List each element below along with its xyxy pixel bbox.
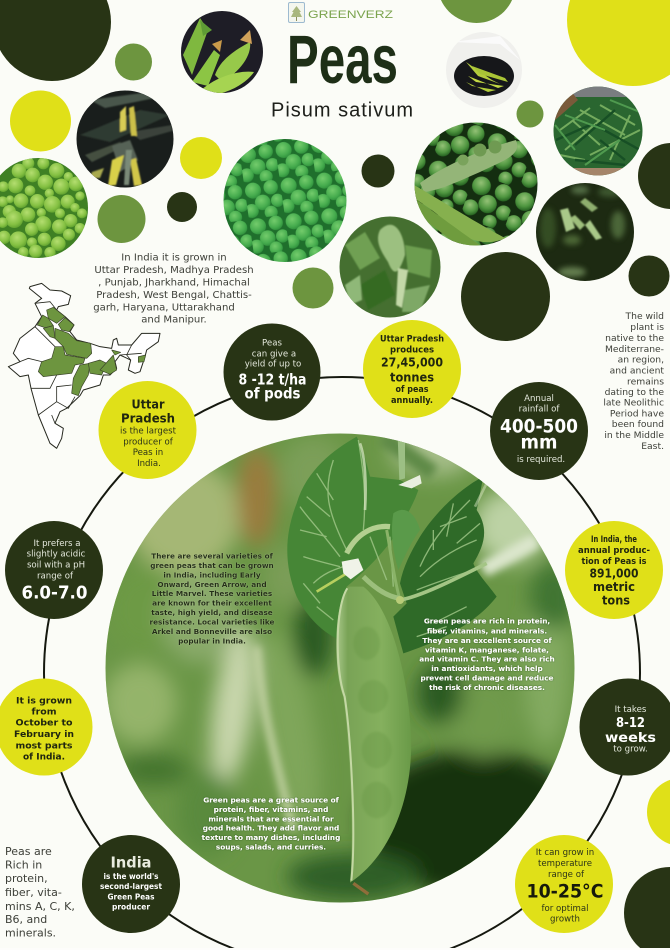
circle: yield: can give a <box>252 350 296 360</box>
photo: peas with open pods <box>414 122 538 248</box>
paragraph: health: texture to many dishes, including <box>202 833 340 842</box>
circle: temperature: growth <box>550 914 580 924</box>
paragraph: health: soups, salads, and curries. <box>216 842 326 852</box>
circle: Uttar Pradesh output: produces <box>390 346 434 356</box>
title: Peas <box>287 21 398 98</box>
text: growing states: , Punjab, Jharkhand, Himachal <box>98 278 250 288</box>
paragraph: varieties: Onward, Green Arrow, and <box>157 580 267 589</box>
photo: pea plant leaves <box>339 216 441 318</box>
photo: green beans <box>553 86 643 176</box>
photo: peas close-up centre <box>224 139 346 262</box>
text: wild plant history: and ancient <box>610 366 664 376</box>
paragraph: nutrients: vitamin K, manganese, folate, <box>425 646 549 654</box>
circle: annual production: metric <box>593 580 635 594</box>
circle: soil pH: It prefers a <box>33 539 81 549</box>
circle: Uttar Pradesh output: 27,45,000 <box>381 354 443 370</box>
paragraph: varieties: are known for their excellent <box>152 598 272 608</box>
circle: India second-largest: producer <box>112 902 150 912</box>
circle: soil pH: soil with a pH <box>27 560 85 570</box>
text: wild plant history: plant is <box>630 322 664 333</box>
circle: growing season: of India. <box>23 752 65 762</box>
circle: Uttar Pradesh largest producer: Peas in <box>133 448 163 458</box>
circle: rainfall: mm <box>520 432 558 454</box>
text: nutrients summary: mins A, C, K, <box>5 900 75 913</box>
photo: pods in black bowl <box>446 32 522 108</box>
circle: rainfall: is required. <box>517 455 565 465</box>
paragraph: nutrients: in antioxidants, which help <box>431 664 543 673</box>
circle: rainfall: Annual <box>524 394 554 404</box>
circle: growing time <box>580 678 670 776</box>
paragraph: varieties: Arkel and Bonneville are also <box>152 627 272 636</box>
circle: yield: yield of up to <box>245 360 301 370</box>
text: wild plant history: Mediterrane- <box>605 344 664 355</box>
circle: growing time: weeks <box>605 730 656 746</box>
text: nutrients summary: B6, and <box>5 913 47 926</box>
circle: India second-largest: India <box>110 854 152 872</box>
map of India <box>8 283 160 448</box>
circle: India second-largest <box>82 835 180 933</box>
stems and flower <box>347 526 390 553</box>
text: growing states: Pradesh, West Bengal, Chattis- <box>96 290 252 301</box>
paragraph: varieties: green peas that can be grown <box>150 561 274 570</box>
circle: soil pH: slightly acidic <box>27 550 86 560</box>
circle: growing time: to grow. <box>613 744 648 754</box>
paragraph: health <box>202 796 340 852</box>
circle: yield: 8 -12 t/ha <box>238 370 306 388</box>
circle: rainfall: 400-500 <box>500 416 578 438</box>
circle: Uttar Pradesh largest producer <box>98 381 196 479</box>
circle: growing time: It takes <box>615 705 647 715</box>
leaves <box>287 437 418 640</box>
circle: annual production: annual produc- <box>578 546 650 556</box>
circle: India second-largest: second-largest <box>100 882 162 891</box>
text: wild plant history: been found <box>612 419 664 430</box>
text: wild plant history: Period have <box>610 408 664 420</box>
text: wild plant history: in the Middle <box>604 430 664 441</box>
circle: rainfall: rainfall of <box>519 404 560 414</box>
circle: growing time: 8-12 <box>616 715 645 731</box>
circle: Uttar Pradesh largest producer: is the largest <box>120 426 177 436</box>
circle: soil pH: range of <box>37 572 74 582</box>
text: nutrients summary: Peas are <box>5 845 52 858</box>
circle: growing season: October to <box>16 718 72 728</box>
text: wild plant history <box>603 311 664 452</box>
paragraph: health: protein, fiber, vitamins, and <box>214 805 328 814</box>
photo: dark leaves and pods <box>535 182 635 282</box>
circle: Uttar Pradesh output <box>363 320 461 418</box>
circle: temperature <box>515 835 613 933</box>
circle: soil pH: 6.0-7.0 <box>22 582 88 604</box>
text: nutrients summary: protein, <box>5 872 48 885</box>
circle: Uttar Pradesh output: Uttar Pradesh <box>380 334 444 344</box>
ring line <box>44 377 640 950</box>
circle: Uttar Pradesh largest producer: Pradesh <box>121 412 175 426</box>
circle: yield: Peas <box>262 338 282 348</box>
paragraph: varieties: popular in India. <box>178 636 246 646</box>
text: wild plant history: an region, <box>618 354 664 366</box>
circle: Uttar Pradesh output: of peas <box>396 384 429 394</box>
central photo <box>100 423 583 910</box>
circle: annual production: tons <box>602 594 630 608</box>
text: growing states: Uttar Pradesh, Madhya Pradesh <box>94 265 254 276</box>
paragraph: nutrients <box>419 616 555 692</box>
text: wild plant history: The wild <box>625 311 664 322</box>
paragraph: health: good health. They add flavor and <box>203 824 339 832</box>
paragraph: varieties <box>149 552 275 646</box>
text: wild plant history: remains <box>627 376 664 388</box>
circle: temperature: 10-25°C <box>526 882 604 902</box>
circle: India second-largest: is the world's <box>104 872 159 881</box>
text: growing states <box>93 252 254 326</box>
circle: temperature: It can grow in <box>536 848 594 858</box>
circle: Uttar Pradesh largest producer: producer of <box>123 438 174 448</box>
paragraph: nutrients: the risk of chronic diseases. <box>429 683 545 692</box>
circle: yield <box>224 324 320 420</box>
bottom edge strip <box>0 948 670 950</box>
paragraph: nutrients: fiber, vitamins, and minerals. <box>427 626 547 636</box>
circle: temperature: temperature <box>538 859 592 869</box>
logo: GREENVERZ <box>308 9 393 21</box>
text: wild plant history: late Neolithic <box>603 398 664 408</box>
text: growing states: In India it is grown in <box>121 252 227 264</box>
circle: annual production <box>565 521 663 619</box>
text: wild plant history: native to the <box>605 333 664 344</box>
circle: Uttar Pradesh largest producer: Uttar <box>132 398 165 412</box>
photo: peas close-up left <box>0 157 88 258</box>
text: growing states: garh, Haryana, Uttarakhand <box>93 302 235 314</box>
circle: growing season: from <box>32 706 56 718</box>
text: wild plant history: dating to the <box>605 387 664 398</box>
circle: Uttar Pradesh largest producer: India. <box>137 459 161 469</box>
photo: pea pods on dark <box>181 11 263 96</box>
text: nutrients summary: Rich in <box>5 858 42 872</box>
text: nutrients summary: minerals. <box>5 926 56 940</box>
circle: soil pH <box>5 521 103 619</box>
pod <box>336 587 411 883</box>
circle: Uttar Pradesh output: annually. <box>391 395 433 405</box>
paragraph: nutrients: prevent cell damage and reduce <box>420 674 554 682</box>
circle: India second-largest: Green Peas <box>108 892 155 902</box>
paragraph: nutrients: They are an excellent source of <box>422 636 552 645</box>
paragraph: varieties: Little Marvel. These varieties <box>152 589 272 598</box>
text: nutrients summary <box>5 845 75 940</box>
circle: Uttar Pradesh output: tonnes <box>390 370 434 384</box>
circle: annual production: 891,000 <box>590 566 638 580</box>
subtitle: Pisum sativum <box>271 100 413 122</box>
paragraph: nutrients: and vitamin C. They are also rich <box>419 654 555 664</box>
paragraph: varieties: in India, including Early <box>163 570 261 580</box>
circle: growing season <box>0 678 92 776</box>
photo: pods on dark vine <box>76 90 174 188</box>
circle: annual production: tion of Peas is <box>582 557 646 567</box>
paragraph: varieties: taste, high yield, and disease <box>151 608 273 617</box>
logo <box>288 2 393 22</box>
text: wild plant history: East. <box>641 441 664 452</box>
circle: yield: of pods <box>244 384 301 402</box>
circle: growing season: February in <box>14 729 74 740</box>
circle: rainfall <box>490 382 588 480</box>
paragraph: varieties: resistance. Local varieties like <box>149 618 275 626</box>
circle: growing season: It is grown <box>16 696 72 706</box>
circle: temperature: range of <box>548 870 585 880</box>
paragraph: health: minerals that are essential for <box>208 814 334 824</box>
paragraph: nutrients: Green peas are rich in protein, <box>424 616 550 626</box>
circle: growing season: most parts <box>16 740 73 752</box>
paragraph: health: Green peas are a great source of <box>203 796 340 804</box>
text: growing states: and Manipur. <box>141 314 207 326</box>
circle: temperature: for optimal <box>541 904 589 914</box>
circle: annual production: In India, the <box>591 535 637 545</box>
text: nutrients summary: fiber, vita- <box>5 886 62 899</box>
paragraph: varieties: There are several varieties of <box>151 552 274 560</box>
